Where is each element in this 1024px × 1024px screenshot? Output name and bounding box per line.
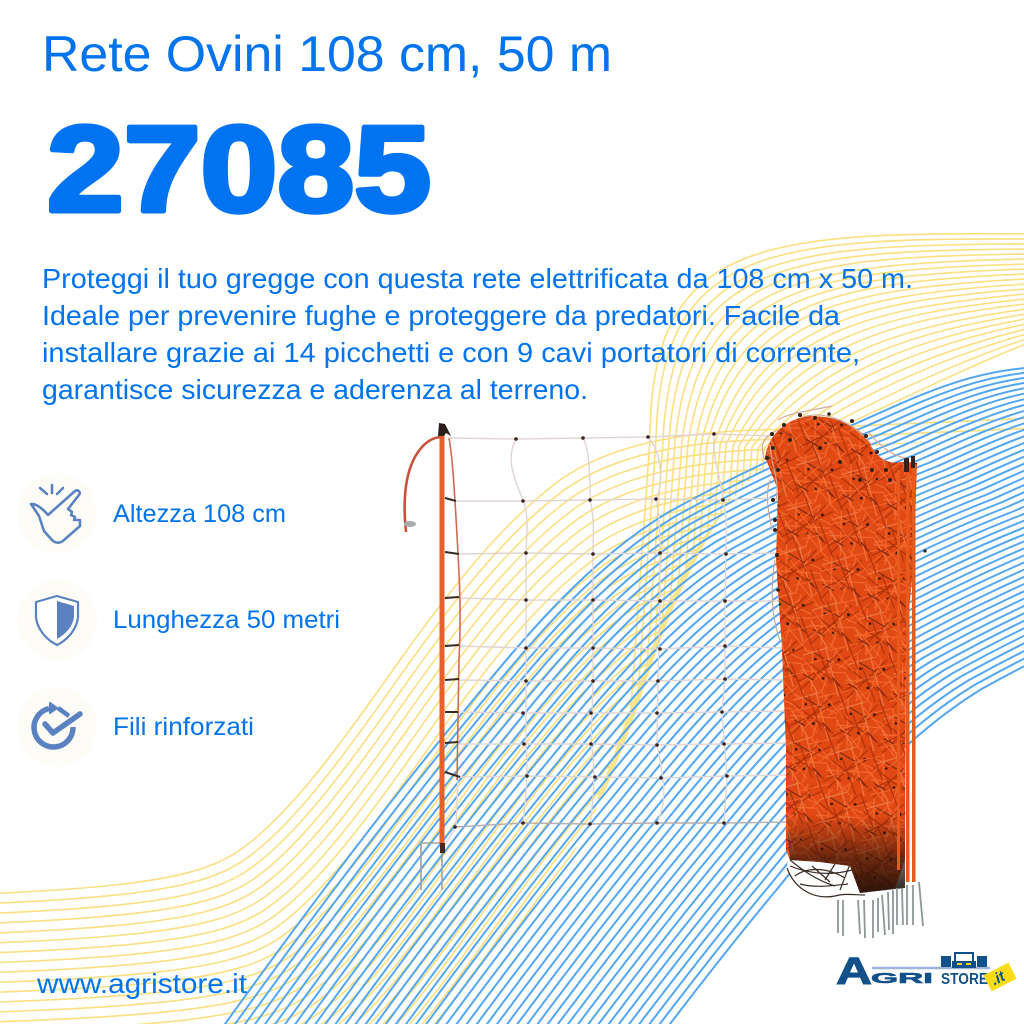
description text xyxy=(42,263,913,405)
product code: 27085 xyxy=(47,101,431,237)
post connectors xyxy=(445,498,460,777)
icon: shield xyxy=(36,596,78,645)
logo divider xyxy=(872,967,990,969)
description text: Ideale per prevenire fughe e proteggere da predatori. Facile da xyxy=(42,300,841,331)
roll top wires and knots xyxy=(762,406,927,640)
feature: lunghezza: Lunghezza 50 metri xyxy=(113,606,340,634)
roll posts xyxy=(897,462,916,882)
logo .it badge: .it xyxy=(988,967,1009,989)
product photo: electric net xyxy=(404,406,927,938)
title: Rete Ovini 108 cm, 50 m xyxy=(42,26,612,82)
cable with clip xyxy=(404,437,441,532)
logo wordmark: A xyxy=(836,951,872,993)
logo: Agri Store: STORE xyxy=(941,971,988,988)
net knots xyxy=(453,432,729,829)
description text: installare grazie ai 14 picchetti e con 9 cavi portatori di corrente, xyxy=(42,337,860,368)
feature: altezza: Altezza 108 cm xyxy=(113,500,286,528)
orange post xyxy=(440,432,444,844)
logo: Agri Store: GRI xyxy=(871,970,933,987)
feature: fili xyxy=(17,687,254,767)
website: www.agristore.it xyxy=(36,968,247,999)
net roll xyxy=(762,406,927,938)
net mesh xyxy=(445,434,790,845)
roll lower dark section xyxy=(786,815,905,893)
loose bottom mesh xyxy=(787,855,865,898)
logo .it badge xyxy=(983,963,1017,991)
ground stake xyxy=(421,843,442,890)
post tops xyxy=(904,456,915,472)
roll texture xyxy=(765,416,917,893)
feature: altezza xyxy=(17,473,286,553)
feature: lunghezza xyxy=(17,580,340,660)
logo tractor xyxy=(941,953,987,968)
description text: garantisce sicurezza e aderenza al terreno. xyxy=(42,374,588,405)
feature: fili: Fili rinforzati xyxy=(113,713,254,741)
icon: pointing hand xyxy=(31,485,80,543)
post cap xyxy=(438,423,451,436)
icon: check with circular arrow xyxy=(34,703,80,747)
roll body xyxy=(765,416,917,893)
post foot xyxy=(440,843,445,853)
logo: Agri Store xyxy=(836,951,1017,993)
red side wire xyxy=(449,438,460,780)
description text: Proteggi il tuo gregge con questa rete elettrificata da 108 cm x 50 m. xyxy=(42,263,913,294)
bottom stakes xyxy=(838,882,923,938)
